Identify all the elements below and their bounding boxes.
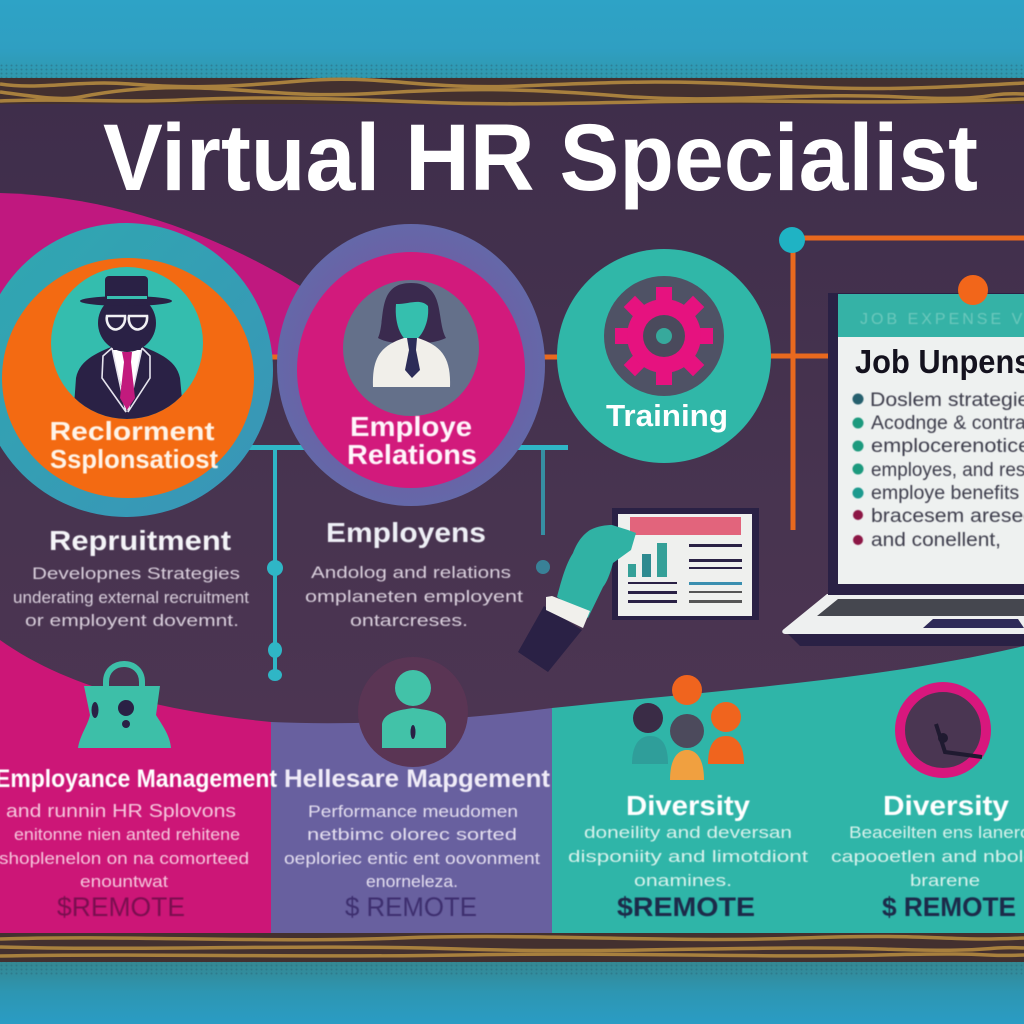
text block: compliance management <box>0 765 278 922</box>
screen <box>838 336 1024 584</box>
bullet list: Doslem strategies <box>870 390 1024 411</box>
panel: teal <box>552 646 1024 933</box>
bottom colour panels <box>0 640 1024 933</box>
top wooden frame <box>0 78 1024 104</box>
circle label: training: Training <box>606 398 728 433</box>
laptop <box>782 275 1024 646</box>
remote tag: $REMOTE <box>57 892 185 922</box>
tablet <box>612 508 759 620</box>
text block: diversity two <box>831 790 1024 922</box>
top-left magenta swoosh <box>0 193 310 420</box>
bottom wooden frame <box>0 933 1024 962</box>
panel: purple <box>271 708 552 933</box>
text block: recruitment: Developnes Strategies <box>32 564 240 583</box>
screen header <box>838 294 1024 337</box>
circle label: recruitment <box>50 416 218 474</box>
remote tag: $REMOTE <box>617 892 755 922</box>
sleeve <box>518 606 582 672</box>
circle label: employee relations: Employe <box>350 411 472 442</box>
text block: performance management: Hellesare Mapgement <box>284 765 551 793</box>
text block: performance management: netbimc olorec sorted <box>307 825 517 844</box>
icon: bag <box>78 664 171 748</box>
text block: diversity one: disponiity and limotdiont <box>568 847 808 866</box>
text block: employee: ontarcreses. <box>350 611 468 630</box>
text block: performance management: Performance meudomen <box>308 802 518 821</box>
orange connector lines <box>250 238 1024 530</box>
circle: employee relations <box>277 224 545 506</box>
text block: performance management <box>284 765 551 922</box>
icon: gear <box>615 287 713 385</box>
text block: compliance management: shoplenelon on na comorteed <box>0 849 249 868</box>
bar chart <box>628 543 667 577</box>
text block: employee: Andolog and relations <box>311 563 511 582</box>
top background band <box>0 0 1024 80</box>
icon: glasses <box>107 316 147 329</box>
circle: training <box>557 249 771 463</box>
bottom background band <box>0 960 1024 1024</box>
icon: group of people <box>632 675 744 780</box>
circle label: employee relations <box>347 411 477 470</box>
laptop bezel <box>828 293 1024 595</box>
laptop base <box>782 594 1024 634</box>
circle label: recruitment: Ssplonsatiost <box>50 444 218 474</box>
cuff <box>546 596 590 628</box>
text block: recruitment: or employent dovemnt. <box>25 611 239 630</box>
text block: diversity two: Beaceilten ens lanerop <box>849 823 1024 842</box>
orange pin <box>958 275 988 305</box>
icon: agent in hat <box>73 276 184 420</box>
icon: hand holding tablet <box>518 508 759 672</box>
text block: recruitment: Repruitment <box>49 525 231 556</box>
bullet list <box>852 390 1024 551</box>
teal connector: right <box>508 445 568 574</box>
text block: recruitment <box>13 525 249 630</box>
bullet list: emplocerenotices <box>871 436 1024 457</box>
icon: clock <box>900 687 986 773</box>
text block: employee: omplaneten employent <box>305 587 523 606</box>
icon: person <box>358 657 468 767</box>
text block: diversity two: capooetlen and nbolone <box>831 847 1024 866</box>
text block: compliance management: enountwat <box>80 872 168 891</box>
icon: woman <box>373 283 450 387</box>
blue node <box>779 227 805 253</box>
text block: diversity one: doneility and deversan <box>584 823 792 842</box>
text block: performance management: enorneleza. <box>366 872 458 891</box>
text block: diversity two: Diversity <box>883 790 1009 821</box>
hand <box>557 525 636 618</box>
laptop shadow <box>788 634 1024 646</box>
text block: compliance management: and runnin HR Splovons <box>6 801 236 821</box>
circle: recruitment <box>0 223 273 517</box>
title: Virtual HR Specialist <box>103 105 978 211</box>
teal connector: left <box>243 445 309 681</box>
bullet list: and conellent, <box>871 530 1001 551</box>
text block: performance management: oeploriec entic ent oovonment <box>284 849 540 868</box>
text block: compliance management: enitonne nien anted rehitene <box>14 825 240 844</box>
text block: diversity one: onamines. <box>634 871 732 890</box>
text block: employee <box>305 517 523 630</box>
bullet list: bracesem areseet <box>871 506 1024 527</box>
circle label: recruitment: Reclorment <box>50 416 215 446</box>
text block: compliance management: Employance Management <box>0 765 278 793</box>
text block: diversity two: brarene <box>910 871 980 890</box>
text block: diversity one <box>568 790 808 922</box>
text block: recruitment: underating external recruitment <box>13 588 249 607</box>
remote tag: $ REMOTE <box>882 892 1016 922</box>
panel: magenta <box>0 640 271 933</box>
circle label: employee relations: Relations <box>347 439 477 470</box>
text block: diversity one: Diversity <box>626 790 750 821</box>
text block: employee: Employens <box>326 517 486 548</box>
remote tag: $ REMOTE <box>345 892 477 922</box>
